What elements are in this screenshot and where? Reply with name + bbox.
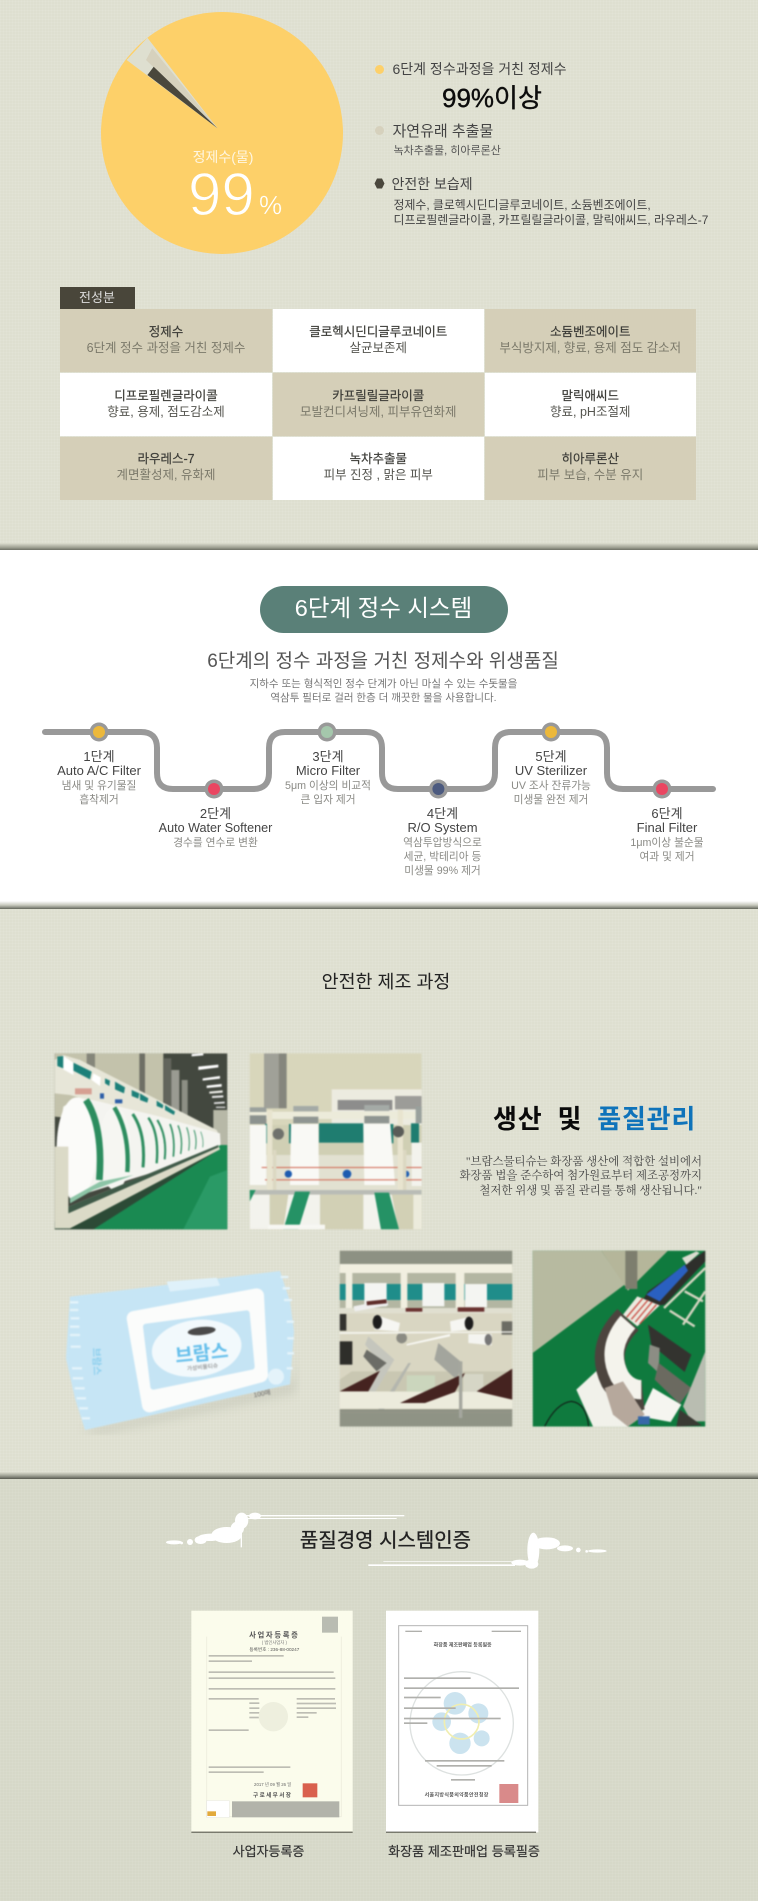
- step 3 label: 큰 입자 제거: [300, 794, 356, 806]
- pill heading: 6단계 정수 시스템: [295, 595, 472, 621]
- cell: hyaluronic acid: 히아루론산: [561, 452, 619, 466]
- step 4 label: [403, 806, 482, 877]
- step 4 label: 역삼투압방식으로: [403, 837, 482, 849]
- quote text: [460, 1155, 702, 1197]
- step 5 label: [511, 749, 591, 806]
- pipeline diagram: [42, 722, 716, 798]
- cell: dipropylene glycol: 향료, 용제, 점도감소제: [107, 404, 225, 418]
- photo: folding machine: [338, 1250, 514, 1428]
- cell: green tea extract: 피부 진정 , 맑은 피부: [324, 468, 433, 482]
- step 4 label: 미생물 99% 제거: [404, 865, 481, 877]
- step 3 label: 5μm 이상의 비교적: [285, 780, 371, 792]
- legend detail: natural extracts: 녹차추출물, 히아루론산: [394, 145, 501, 157]
- cell: green tea extract: 녹차추출물: [349, 452, 407, 466]
- step 1 label: Auto A/C Filter: [57, 763, 141, 778]
- side label: 브람스: [90, 1348, 103, 1376]
- cell: laureth-7: 라우레스-7: [137, 452, 195, 466]
- document: business registration: [191, 1611, 353, 1833]
- step 6 label: 1μm이상 불순물: [630, 837, 704, 849]
- cell: purified water: 6단계 정수 과정을 거친 정제수: [87, 340, 245, 354]
- cell: dipropylene glycol: 디프로필렌글라이콜: [114, 388, 218, 402]
- legend detail: moisturizers list: 디프로필렌글라이콜, 카프릴릴글라이콜, 말릭애씨드, 라우레스-7: [394, 213, 708, 227]
- pie label: purified water: 정제수(물): [193, 149, 253, 165]
- step 4 label: R/O System: [407, 820, 478, 835]
- cell: chlorhexidine: 클로헥시딘디글루코네이트: [309, 324, 447, 338]
- legend text: safe moisturizers: 안전한 보습제: [392, 176, 473, 192]
- legend text: purified water: 6단계 정수과정을 거친 정제수: [392, 61, 567, 77]
- caption: business registration certificate: 사업자등록증: [233, 1844, 304, 1859]
- heading: safe manufacturing process: 안전한 제조 과정: [322, 971, 450, 992]
- step 5 label: UV 조사 잔류가능: [511, 780, 591, 792]
- caption: cosmetics manufacturing registration certificate: 화장품 제조판매업 등록필증: [388, 1844, 540, 1859]
- step 2 label: [158, 806, 272, 849]
- lid inner window: [146, 1313, 252, 1387]
- document: business registration: 구로세무서장: [253, 1791, 292, 1799]
- step 3 label: 3단계: [312, 749, 344, 764]
- cell: purified water: 정제수: [149, 324, 183, 338]
- document: business registration: 사업자등록증: [249, 1630, 300, 1639]
- cell: hyaluronic acid: 피부 보습, 수분 유지: [537, 468, 643, 482]
- document: business registration: 등록번호 : 236-88-00247: [249, 1646, 300, 1653]
- step 4 label: 4단계: [427, 806, 458, 821]
- legend detail: moisturizers list: [394, 198, 708, 227]
- package body: [66, 1271, 294, 1430]
- quote text: 철저한 위생 및 품질 관리를 통해 생산됩니다.": [479, 1185, 702, 1197]
- legend value: 99 percent or more: 99%이상: [442, 83, 542, 113]
- product shadow: [83, 1355, 298, 1433]
- description: [250, 678, 517, 704]
- step 3 label: Micro Filter: [296, 763, 360, 778]
- step 6 label: 여과 및 제거: [639, 851, 695, 863]
- bullet: dark hexagon: [374, 178, 384, 188]
- table: ingredients: [60, 309, 696, 500]
- panel: six step water purification: [0, 550, 758, 902]
- step 2 label: 2단계: [200, 806, 231, 821]
- cell: caprylyl glycol: [272, 373, 484, 436]
- node 3: [318, 722, 336, 742]
- cell: malic acid: [484, 373, 696, 436]
- pill heading: [260, 586, 508, 633]
- step 6 label: 6단계: [651, 806, 683, 821]
- step 1 label: 1단계: [83, 749, 115, 764]
- node 2: [204, 780, 224, 798]
- step 6 label: Final Filter: [637, 820, 697, 835]
- step 5 label: UV Sterilizer: [515, 763, 587, 778]
- bullet: beige: [374, 126, 384, 134]
- legend detail: moisturizers list: 정제수, 클로헥시딘디글루코네이트, 소듐벤조에이트,: [394, 198, 651, 212]
- brand name: 브람스: [174, 1340, 229, 1368]
- document: cosmetics manufacturing registration: 서울지방식품의약품안전청장: [425, 1792, 489, 1799]
- package lid: [134, 1296, 261, 1405]
- cell: malic acid: 향료, pH조절제: [550, 404, 630, 418]
- step 6 label: [630, 806, 704, 863]
- product descriptor: 가성비물티슈: [187, 1361, 218, 1373]
- tab: all ingredients: [60, 287, 134, 308]
- step 2 label: 경수를 연수로 변환: [173, 837, 258, 849]
- step 1 label: 흡착제거: [79, 794, 119, 806]
- cell: green tea extract: [272, 436, 484, 500]
- tab: all ingredients: 전성분: [79, 290, 115, 305]
- photo: machine with white fabric and teal roller: [248, 1052, 422, 1230]
- step 3 label: [285, 749, 371, 806]
- step 1 label: [57, 749, 141, 806]
- certificates block with clouds and documents: [166, 1512, 606, 1833]
- document: business registration: ( 법인사업자 ): [262, 1639, 287, 1646]
- product: wet tissue package: [66, 1270, 296, 1434]
- cell: chlorhexidine: 살균보존제: [349, 340, 407, 354]
- pie chart: 99 percent purified water: [101, 12, 343, 254]
- bullet: yellow: [374, 64, 384, 74]
- step 4 label: 세균, 박테리아 등: [404, 851, 481, 863]
- step 5 label: 5단계: [535, 749, 567, 764]
- cell: caprylyl glycol: 모발컨디셔닝제, 피부유연화제: [300, 404, 456, 418]
- document: cosmetics manufacturing registration: 화장품 제조판매업 등록필증: [434, 1642, 492, 1649]
- subheading: 6단계의 정수 과정을 거친 정제수와 위생품질: [207, 651, 559, 672]
- document: cosmetics manufacturing registration: [386, 1611, 538, 1833]
- heading: quality management system certification: 품질경영 시스템인증: [300, 1530, 471, 1552]
- heading: production and quality control: 생산 및 품질관리: [493, 1104, 696, 1134]
- photo: rolls of nonwoven fabric in factory: [54, 1052, 228, 1230]
- quote text: "브람스물티슈는 화장품 생산에 적합한 설비에서: [466, 1156, 702, 1168]
- legend text: natural extracts: 자연유래 추출물: [392, 123, 493, 140]
- cell: laureth-7: 계면활성제, 유화제: [117, 468, 215, 482]
- cell: hyaluronic acid: [484, 436, 696, 500]
- node 5: [542, 722, 560, 742]
- cloud: right: [368, 1533, 607, 1569]
- node 1: [90, 722, 108, 742]
- step 2 label: Auto Water Softener: [159, 821, 272, 835]
- cell: caprylyl glycol: 카프릴릴글라이콜: [332, 388, 424, 402]
- count: 100매: [253, 1388, 271, 1399]
- legend: pie chart explanations: [374, 61, 708, 227]
- cell: chlorhexidine: [272, 309, 484, 372]
- node 6: [652, 780, 672, 798]
- quote text: 화장품 법을 준수하여 첨가원료부터 제조공정까지: [460, 1170, 702, 1182]
- cell: sodium benzoate: 부식방지제, 향료, 용제 점도 감소저: [499, 340, 681, 354]
- step 1 label: 냄새 및 유기물질: [62, 780, 136, 792]
- photo: conveyor line: [532, 1250, 706, 1428]
- pie value 99: 99: [188, 161, 255, 228]
- pie value percent sign: %: [259, 190, 282, 220]
- cell: sodium benzoate: 소듐벤조에이트: [550, 324, 630, 338]
- brand pill: [187, 1326, 216, 1336]
- cloud: left: [166, 1513, 404, 1547]
- description: 지하수 또는 형식적인 정수 단계가 아닌 마실 수 있는 수돗물을: [250, 678, 517, 690]
- description: 역삼투 필터로 걸러 한층 더 깨끗한 물을 사용합니다.: [270, 692, 497, 704]
- step 5 label: 미생물 완전 제거: [514, 794, 588, 806]
- node 4: [429, 780, 448, 798]
- cell: malic acid: 말릭애씨드: [561, 388, 619, 402]
- cell: purified water: [60, 309, 272, 372]
- cell: sodium benzoate: [484, 309, 696, 372]
- cell: laureth-7: [60, 436, 272, 500]
- cell: dipropylene glycol: [60, 373, 272, 436]
- document: business registration: 2017 년 09 월 26 일: [254, 1781, 291, 1788]
